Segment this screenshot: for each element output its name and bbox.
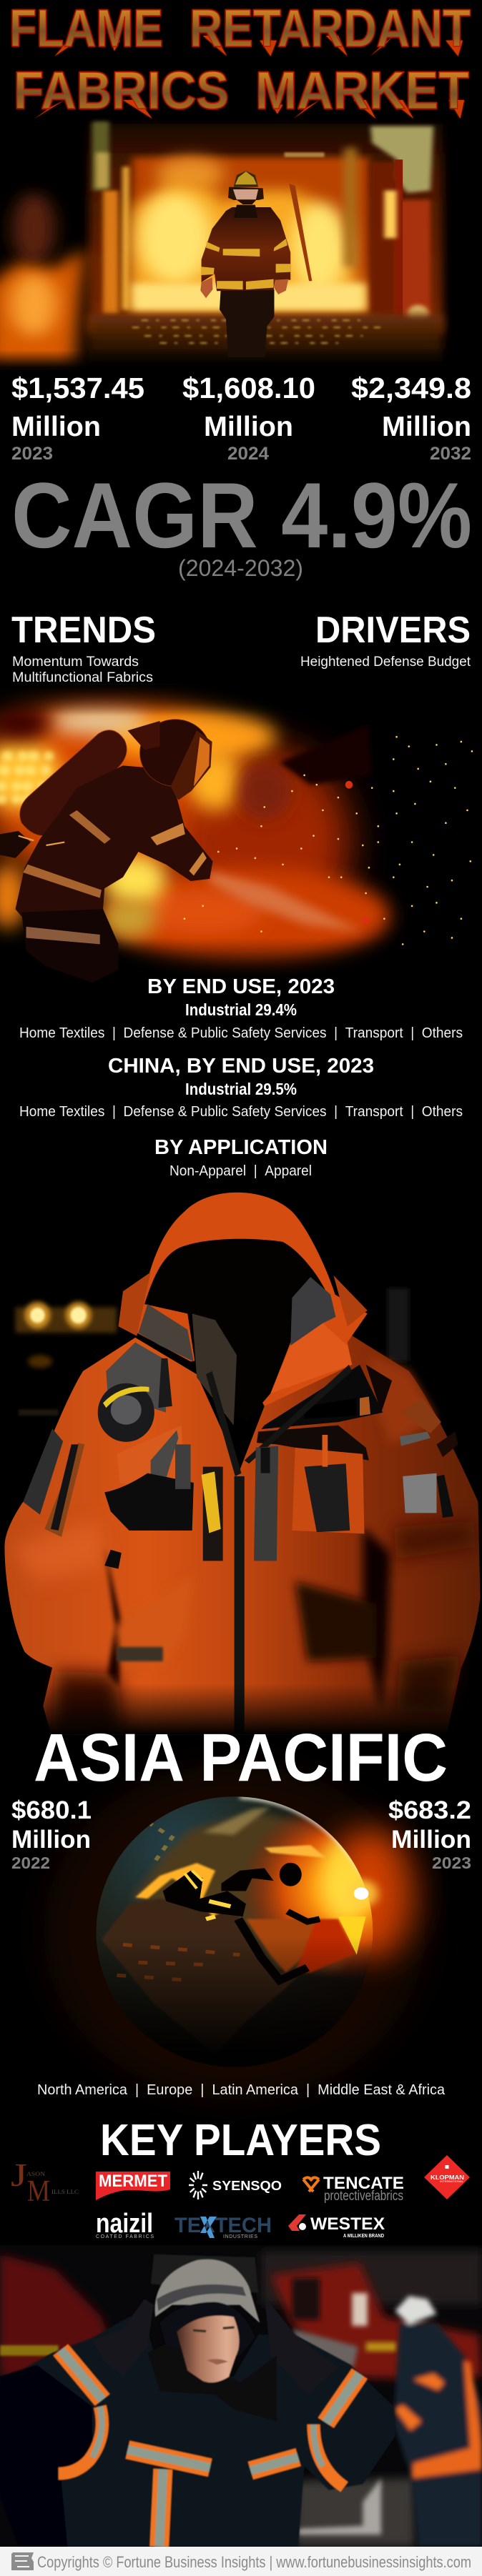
stat: 2032: 2032 — [430, 444, 471, 464]
drivers — [300, 610, 471, 670]
logo: Jason Mills: M — [27, 2175, 50, 2208]
title: MARKET — [255, 61, 469, 120]
title spikes — [34, 36, 464, 119]
Asia Pacific: ASIA PACIFIC — [34, 1720, 448, 1796]
footer bar — [0, 2547, 482, 2576]
helmet — [151, 2254, 258, 2293]
logo: Westex: A MILLIKEN BRAND — [343, 2232, 384, 2239]
logo: Naizil: naizil — [96, 2209, 153, 2239]
title — [9, 0, 471, 120]
logo: Klopman — [424, 2155, 470, 2199]
stat: 2023: $683.2 — [388, 1796, 471, 1824]
stat: 2023: 2023 — [432, 1854, 471, 1872]
CAGR: (2024-2032) — [178, 555, 303, 581]
stat: 2023 — [388, 1796, 471, 1872]
arm gadget — [400, 1398, 458, 1518]
logo: Naizil: COATED FABRICS — [96, 2234, 154, 2239]
image: glowing globe — [44, 1764, 455, 2100]
image: female firefighter with helmet — [0, 2239, 482, 2550]
china by end use: Home Textiles | Defense & Public Safety Services | Transport | Others — [19, 1103, 463, 1120]
shoulder patch — [106, 1343, 166, 1413]
by end use — [19, 975, 463, 1041]
logo: TenCate: protectivefabrics — [324, 2189, 403, 2204]
Asia Pacific — [11, 1720, 471, 1872]
stat: 2022: $680.1 — [11, 1796, 92, 1824]
collar and upper chest — [261, 1365, 383, 1429]
center zipper — [206, 1365, 352, 1738]
hood — [137, 1193, 368, 1406]
background firefighter — [393, 2296, 482, 2547]
logo: Jason Mills — [11, 2157, 79, 2208]
face — [177, 2316, 239, 2382]
reflective stripes — [61, 2349, 360, 2547]
yellow device — [202, 1467, 223, 1561]
stat: 2023: Million — [391, 1826, 471, 1854]
drivers: Heightened Defense Budget — [300, 655, 471, 670]
logo: Syensqo — [189, 2171, 282, 2199]
stat: 2024: 2024 — [227, 444, 269, 464]
trends — [11, 610, 156, 685]
by end use: BY END USE, 2023 — [147, 975, 335, 998]
logo: Westex: WESTEX — [310, 2214, 385, 2234]
stat: 2023: Million — [11, 412, 101, 442]
logo: Syensqo: SYENSQO — [212, 2178, 282, 2193]
hero image: firefighter walking out of burning building — [0, 121, 482, 372]
logo: Jason Mills: J — [11, 2157, 27, 2193]
chest gear — [104, 1426, 194, 1569]
key players heading: KEY PLAYERS — [100, 2116, 381, 2165]
trends: TRENDS — [11, 610, 156, 651]
water spray — [209, 871, 363, 932]
image: firefighter spraying hose — [0, 684, 482, 997]
trends: Momentum Towards — [12, 655, 139, 670]
logo: Jason Mills: ILLS LLC — [51, 2188, 79, 2195]
stat: 2022: Million — [11, 1826, 91, 1854]
Europe lights — [135, 1863, 234, 1916]
china by end use: Industrial 29.5% — [185, 1080, 297, 1098]
china by end use: CHINA, BY END USE, 2023 — [108, 1055, 374, 1078]
logos — [11, 2155, 470, 2239]
firefighter silhouette — [0, 720, 212, 983]
drivers: DRIVERS — [315, 610, 471, 651]
logo: TenCate: TENCATE — [323, 2174, 404, 2193]
by application — [154, 1136, 328, 1179]
trends: Multifunctional Fabrics — [12, 670, 153, 685]
china by end use — [19, 1055, 463, 1120]
logo: TenCate — [303, 2174, 404, 2204]
stat: 2024: $1,608.10 — [182, 372, 315, 404]
stat: 2023 — [11, 372, 144, 464]
jacket shading — [12, 1355, 476, 1738]
by end use: Home Textiles | Defense & Public Safety Services | Transport | Others — [19, 1025, 463, 1041]
jacket body — [4, 1333, 481, 1738]
logo: Jason Mills: ASON — [26, 2171, 45, 2177]
main firefighter — [0, 2254, 395, 2547]
market value stats — [11, 372, 471, 464]
stat: 2024: Million — [204, 412, 293, 442]
stat: 2032: Million — [382, 412, 471, 442]
sleeve patch and zipper — [23, 1428, 63, 1515]
title: FLAME — [9, 0, 163, 58]
stat: 2023: $1,537.45 — [11, 372, 144, 404]
firefighter figure — [200, 171, 290, 357]
logo: Mermet: MERMET — [99, 2172, 167, 2191]
by application: Non-Apparel | Apparel — [169, 1163, 312, 1179]
logo: Mermet — [96, 2172, 170, 2200]
icon: Fortune Business Insights logo — [11, 2552, 34, 2570]
stat: 2032 — [351, 372, 471, 464]
tape measure device — [98, 1358, 172, 1442]
stat: 2023: 2023 — [11, 444, 53, 464]
image: orange protective jacket — [0, 1193, 482, 1738]
zipper strip — [254, 1446, 278, 1561]
logo: Textech: INDUSTRIES — [223, 2234, 257, 2239]
logo: Textech: TEXTECH — [174, 2214, 272, 2237]
stat: 2032: $2,349.8 — [351, 372, 471, 404]
title: FABRICS — [14, 61, 229, 120]
stat: 2022: 2022 — [11, 1854, 50, 1872]
logo: Klopman: INTERNATIONAL — [440, 2180, 463, 2183]
sparks — [185, 737, 472, 944]
by end use: Industrial 29.4% — [185, 1000, 297, 1019]
stat: 2024 — [182, 372, 315, 464]
logo: Westex — [288, 2214, 385, 2239]
stat: 2022 — [11, 1796, 92, 1872]
by application: BY APPLICATION — [154, 1136, 328, 1159]
black pouch — [292, 1435, 364, 1533]
other regions: North America | Europe | Latin America | Middle East & Africa — [37, 2082, 446, 2098]
logo: Klopman: KLOPMAN — [431, 2174, 464, 2181]
